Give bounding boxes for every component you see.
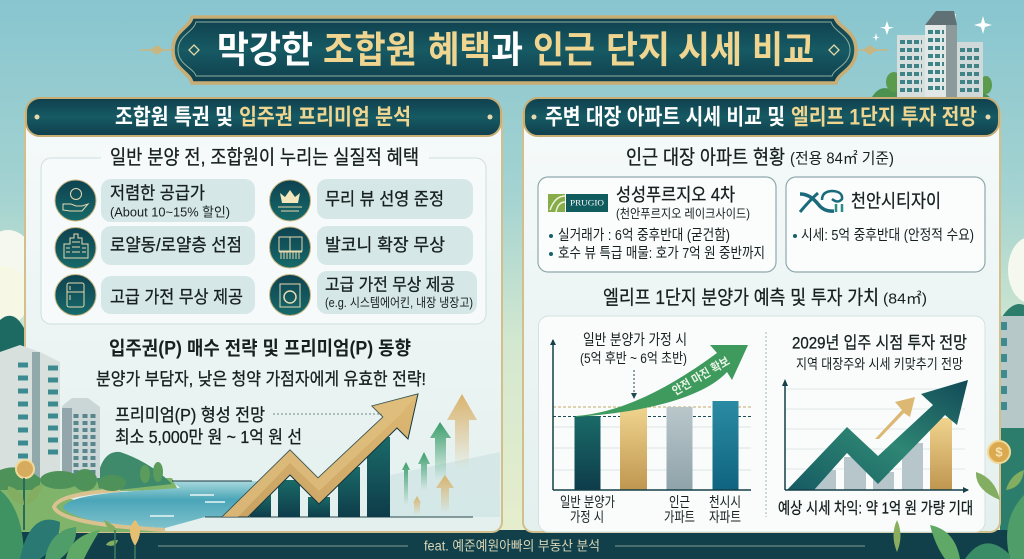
chart: premium growth arrow	[205, 394, 500, 517]
card: Xi	[786, 177, 985, 272]
premium forecast text: 프리미엄(P) 형성 전망	[115, 405, 265, 425]
title plaque: 조합원	[323, 30, 417, 70]
benefit: low supply price	[55, 179, 255, 222]
green margin arrow	[576, 345, 748, 417]
panel: union member benefits and premium	[25, 98, 502, 532]
chart: price comparison bars: 인근	[669, 494, 690, 510]
right background clouds, hill and building	[1000, 237, 1024, 540]
benefit: lake view	[270, 179, 473, 221]
chart: 2029 investment outlook: 지역 대장주와 시세 키맞추기 전망	[796, 356, 963, 372]
icon: apartment towers top right	[872, 11, 992, 97]
benefits box	[41, 146, 486, 324]
chart: price comparison bars: (5억 후반 ~ 6억 초반)	[580, 350, 687, 366]
right panel header: 주변 대장 아파트 시세 비교 및	[545, 104, 785, 130]
title plaque: 혜택	[428, 30, 491, 70]
benefit: royal unit	[55, 226, 255, 268]
premium forecast text: 최소 5,000만 원 ~ 1억 원 선	[115, 427, 302, 447]
card: Xi: 천안시티자이	[851, 190, 941, 212]
chart: 2029 investment outlook: 2029년 입주 시점 투자 전망	[792, 334, 967, 352]
left panel header: 입주권 프리미엄 분석	[239, 104, 411, 130]
premium strategy heading: 입주권(P) 매수 전략 및 프리미엄(P) 동향	[109, 338, 411, 360]
left panel header: 조합원 특권 및	[115, 104, 233, 130]
title plaque: 시세	[678, 30, 742, 70]
card: Prugio: 호수 뷰 특급 매물: 호가 7억 원 중반까지	[558, 245, 765, 262]
benefit: system appliances	[270, 271, 477, 316]
chart: 2029 investment outlook: 예상 시세 차익: 약 1억 원 가량 기대	[778, 500, 973, 518]
benefits box: 일반 분양 전, 조합원이 누리는 실질적 혜택	[110, 146, 419, 169]
logo: Prugio: PRUGIO	[570, 198, 604, 208]
footer band: feat. 예준예원아빠의 부동산 분석	[424, 538, 600, 554]
card: Prugio: 실거래가 : 6억 중후반대 (굳건함)	[558, 227, 730, 244]
illustration: right coin and plants	[894, 441, 1024, 559]
logo: Prugio	[548, 194, 608, 212]
nearby apartments heading	[626, 146, 894, 169]
chart: price comparison bars: 자파트	[709, 509, 741, 525]
Elif forecast heading: (84㎡)	[883, 290, 927, 308]
illustration: foreground plants and coin	[0, 460, 140, 559]
benefit: system appliances: 고급 가전 무상 제공	[325, 276, 455, 294]
title plaque: 과	[491, 30, 523, 70]
left background clouds and hill	[0, 230, 34, 559]
icon: small rising arrows	[402, 394, 477, 515]
title plaque	[140, 17, 888, 83]
benefit: appliances: 고급 가전 무상 제공	[110, 287, 243, 307]
right panel header	[524, 98, 999, 136]
card: Prugio: (천안푸르지오 레이크사이드)	[616, 206, 750, 221]
chart: price comparison bars: 천시시	[709, 494, 741, 510]
benefit: low supply price: (About 10~15% 할인)	[110, 204, 230, 220]
chart: 2029 investment outlook	[778, 334, 973, 518]
left panel header	[26, 98, 501, 136]
footer band	[0, 530, 1024, 559]
title plaque: 인근	[533, 30, 595, 70]
premium strategy subheading: 분양가 부담자, 낮은 청약 가점자에게 유효한 전략!	[96, 369, 426, 389]
Elif forecast heading: 엘리프 1단지 분양가 예측 및 투자 가치	[603, 287, 879, 309]
title plaque: 막강한	[217, 30, 313, 70]
right panel header: 엘리프 1단지 투자 전망	[791, 104, 977, 130]
chart: price comparison bars: 가파트	[664, 509, 695, 525]
illustration: right coin and plants: $	[995, 444, 1003, 460]
icon: sparkles	[872, 16, 992, 41]
benefit: balcony	[270, 226, 473, 268]
panel: nearby apartment prices and outlook	[523, 98, 1000, 532]
chart: price comparison bars: 가정 시	[570, 509, 604, 525]
title plaque: 단지	[606, 30, 670, 70]
benefit: royal unit: 로얄동/로얄층 선점	[110, 235, 242, 255]
benefit: system appliances: (e.g. 시스템에어킨, 내장 냉장고)	[325, 296, 473, 310]
card: Xi: 시세: 5억 중후반대 (안정적 수요)	[801, 227, 974, 244]
chart: price comparison bars: 일반 분양가	[560, 494, 615, 510]
card: Prugio: 성성푸르지오 4차	[616, 185, 735, 205]
premium forecast text	[115, 405, 382, 447]
benefit: lake view: 무리 뷰 선영 준정	[325, 189, 444, 209]
green margin arrow: 안전 마진 확보	[669, 353, 732, 398]
benefit: low supply price: 저렴한 공급가	[110, 183, 205, 203]
title plaque: 비교	[752, 30, 814, 70]
illustration: lakeside apartments	[0, 345, 262, 532]
nearby apartments heading: 인근 대장 아파트 현황	[626, 146, 785, 169]
card: Prugio	[538, 177, 776, 272]
logo: Xi	[800, 191, 842, 212]
benefit: appliances	[55, 274, 255, 316]
nearby apartments heading: (전용 84㎡ 기준)	[790, 150, 894, 168]
chart: price comparison bars	[550, 332, 751, 525]
chart box	[538, 316, 985, 532]
benefit: balcony: 발코니 확장 무상	[325, 235, 445, 255]
chart: price comparison bars: 일반 분양가 가정 시	[583, 332, 687, 348]
